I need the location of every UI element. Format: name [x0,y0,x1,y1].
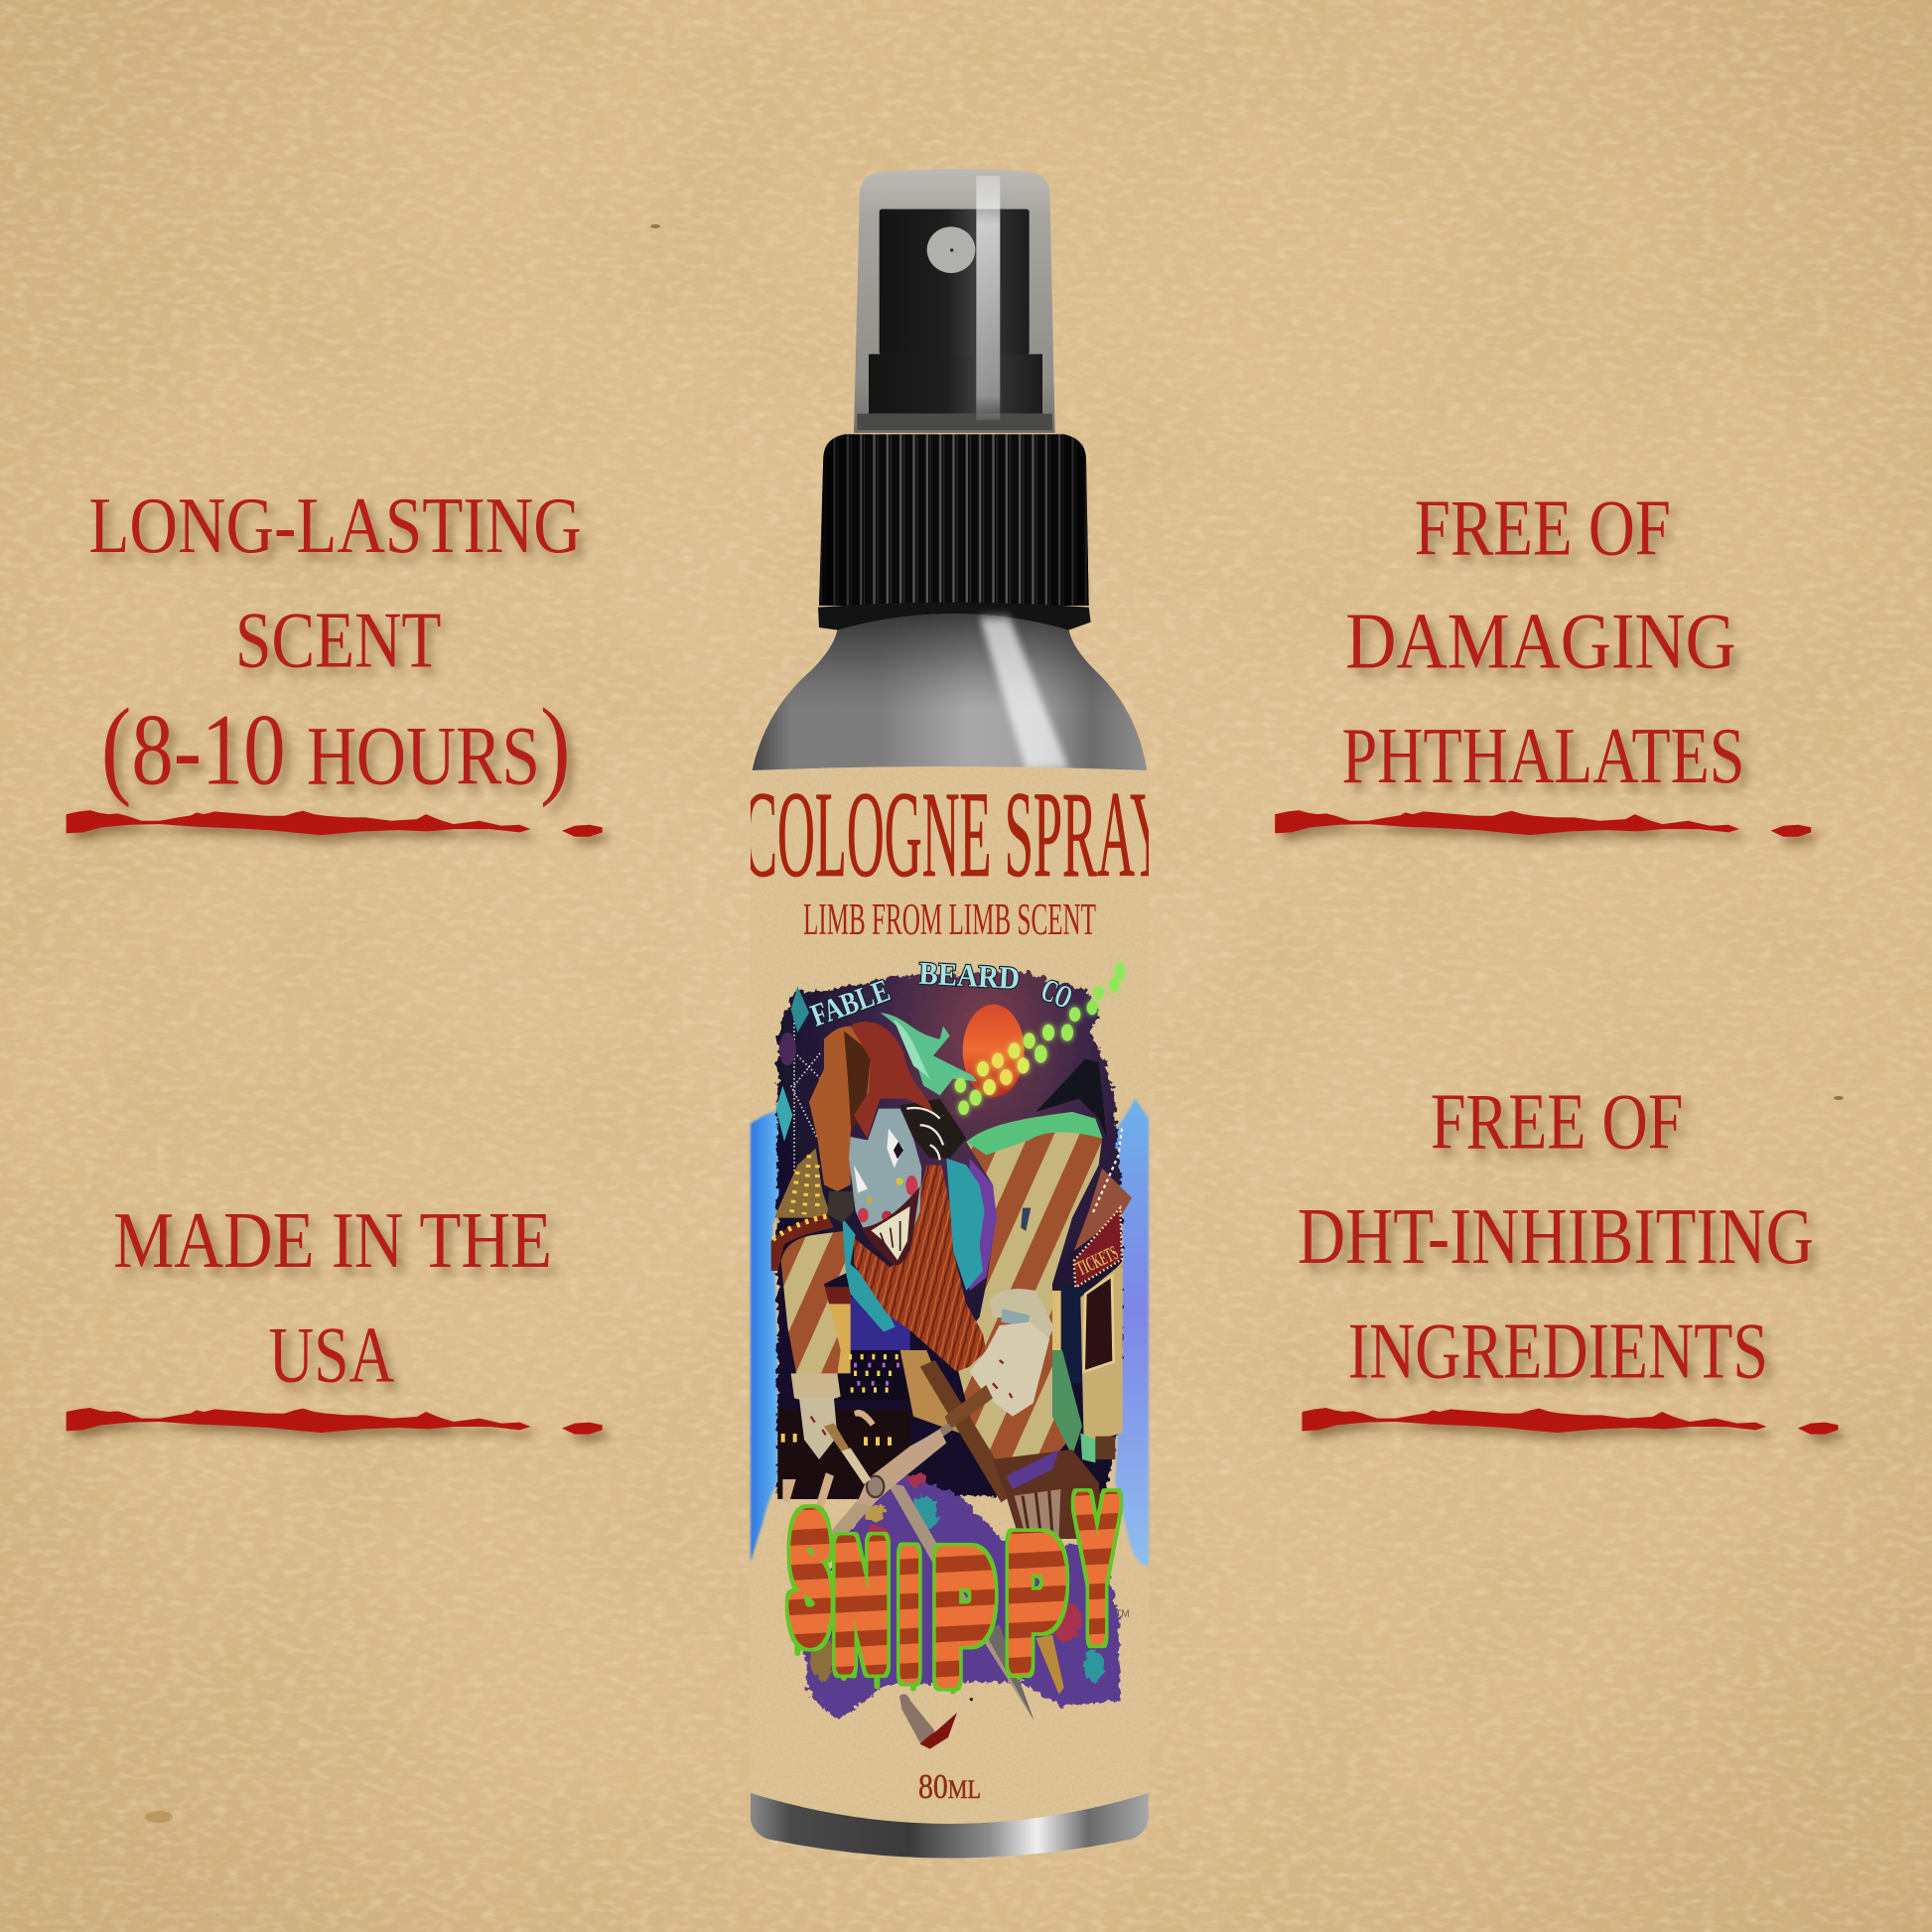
clown face [849,1109,921,1265]
leather strap and pouch [920,1360,1102,1539]
snippy logo: I [900,1522,918,1707]
brand arc: fable beard co: BEARD [918,955,1021,996]
feature: made in the USA: USA [269,1311,394,1399]
blue smoke right [1105,1099,1149,1566]
text: COLOGNE SPRAY [743,766,1168,902]
clown ruffle collar [842,1159,997,1332]
label volume: 80ml: 80ML [918,1767,981,1806]
aluminium bottle base [751,1784,1149,1859]
feature: free of damaging phthalates: DAMAGING [1345,598,1736,686]
feature: free of damaging phthalates [1342,483,1744,800]
severed finger [899,1694,973,1749]
feature: long-lasting scent: (8-10 HOURS) [101,685,571,808]
torn red underline 3 [1275,810,1811,837]
loose severed fingers [782,1410,876,1507]
dashed tent lights [1092,1129,1122,1214]
feature: long-lasting scent: LONG-LASTING [88,482,582,570]
ferris wheel [776,986,821,1184]
snippy logo [791,1463,1117,1713]
striped jacket with green shading [781,1112,1103,1459]
snippy logo: N [836,1511,887,1700]
feature text and underlines [67,482,1838,1435]
feature: free of DHT-inhibiting ingredients: FREE OF [1431,1078,1683,1167]
ribbed black collar [819,434,1089,606]
brand arc: fable beard co: CO [1036,971,1077,1016]
trademark: TM [1115,1608,1130,1619]
torn red underline 1 [67,810,603,837]
scissor handles [824,1385,993,1506]
right gloved hand [970,1289,1054,1417]
feature: free of DHT-inhibiting ingredients: DHT-INHIBITING [1298,1192,1814,1281]
brand arc: fable beard co [806,955,1077,1034]
left ruffle cuff and glove [791,1373,841,1459]
snippy logo: P [936,1520,992,1713]
wavy hair and green hat flap [809,1013,977,1223]
blue smoke left [751,1110,787,1562]
feature: made in the USA [113,1196,552,1399]
red beard [854,1165,986,1372]
black actuator with nozzle [857,176,1052,430]
snippy logo: P [1009,1507,1063,1701]
product label [743,764,1168,1857]
aluminium shoulder [752,614,1147,772]
scissor blades [786,1482,1064,1721]
feature: free of damaging phthalates: PHTHALATES [1342,712,1744,800]
spray pump and cap [818,169,1091,630]
purple city and stall [777,1288,911,1499]
torn red underline 2 [67,1408,603,1435]
torn red underline 4 [1302,1408,1838,1435]
snippy logo: S [791,1486,829,1671]
label artwork: clown illustration: Y [1077,1463,1117,1674]
coaster silhouette [1035,1059,1107,1139]
purple polka-dot pants [804,1472,1120,1721]
night sky scene [777,971,1122,1496]
ticket booth: TICKETS [1073,1242,1122,1281]
string of green lights [955,962,1125,1115]
ticket booth [1052,1169,1132,1459]
chest [900,1350,960,1433]
blood moon [963,1005,1025,1097]
label artwork: clown illustration [751,955,1149,1749]
label subtitle: limb from limb scent: LIMB FROM LIMB SCENT [803,895,1096,944]
feature: free of DHT-inhibiting ingredients: INGREDIENTS [1348,1308,1768,1396]
feature: free of DHT-inhibiting ingredients [1298,1078,1814,1396]
left carnival tent [771,1149,834,1271]
feature: long-lasting scent [88,482,582,808]
brand arc: fable beard co: FABLE [806,972,895,1034]
clear overcap [854,169,1055,433]
slime drips under logo [797,1635,1092,1691]
feature: free of damaging phthalates: FREE OF [1415,483,1671,572]
feature: made in the USA: MADE IN THE [113,1196,552,1285]
collar flange [818,603,1091,630]
feature: long-lasting scent: SCENT [235,596,441,684]
